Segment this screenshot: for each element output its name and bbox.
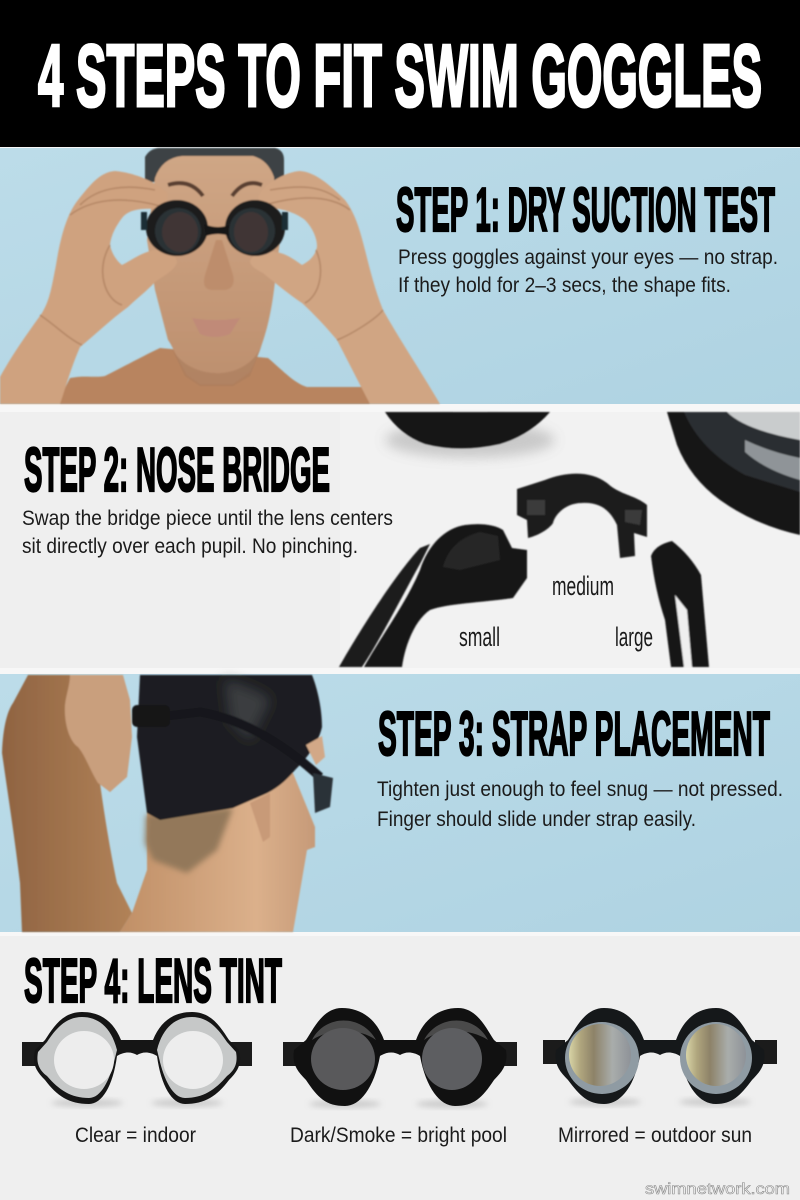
panel: step 3 strap placement <box>0 674 800 932</box>
panel: step 1 dry suction test <box>0 148 800 404</box>
photo: goggle parts and bridge pieces <box>339 412 800 667</box>
label: small: small <box>459 622 500 652</box>
icon: goggles on face <box>141 200 288 256</box>
icon: swim cap <box>137 675 322 820</box>
caption: clear: Clear = indoor <box>75 1124 196 1147</box>
photo: swimmer pressing goggles against eyes <box>0 148 440 404</box>
icon: left strap and small bridge <box>339 544 430 667</box>
text: step 3 description <box>377 778 783 831</box>
panel: step 4 lens tint: STEP 4: LENS TINT <box>24 947 282 1016</box>
icon: left hand <box>0 171 177 404</box>
caption: mirrored: Mirrored = outdoor sun <box>558 1124 752 1147</box>
panel: step 4 lens tint <box>0 936 800 1200</box>
text: step 1 description <box>398 246 778 297</box>
icon: medium bridge piece <box>517 474 647 558</box>
watermark: swimnetwork.com <box>645 1181 790 1198</box>
panel: step 2 nose bridge: STEP 2: NOSE BRIDGE <box>24 436 330 505</box>
text: step 3 description: Finger should slide under strap easily. <box>377 808 696 831</box>
goggles: dark smoke lens <box>283 1008 517 1108</box>
text: step 1 description: If they hold for 2–3 secs, the shape fits. <box>398 274 731 297</box>
photo: swimmer adjusting strap from behind <box>2 675 333 932</box>
text: step 2 description: sit directly over each pupil. No pinching. <box>22 535 358 558</box>
label: large: large <box>615 622 653 652</box>
text: step 2 description: Swap the bridge piece until the lens centers <box>22 507 393 530</box>
label: medium: medium <box>552 571 614 601</box>
icon: right hand <box>250 171 440 404</box>
title banner <box>0 0 800 147</box>
goggles: clear lens <box>22 1012 252 1107</box>
caption: dark smoke: Dark/Smoke = bright pool <box>290 1124 507 1147</box>
goggles: mirrored lens <box>543 1008 777 1106</box>
text: step 2 description <box>22 507 393 558</box>
icon: right strap piece <box>651 541 709 667</box>
panel: step 2 nose bridge <box>0 412 800 668</box>
icon: hand pulling strap <box>65 675 132 792</box>
